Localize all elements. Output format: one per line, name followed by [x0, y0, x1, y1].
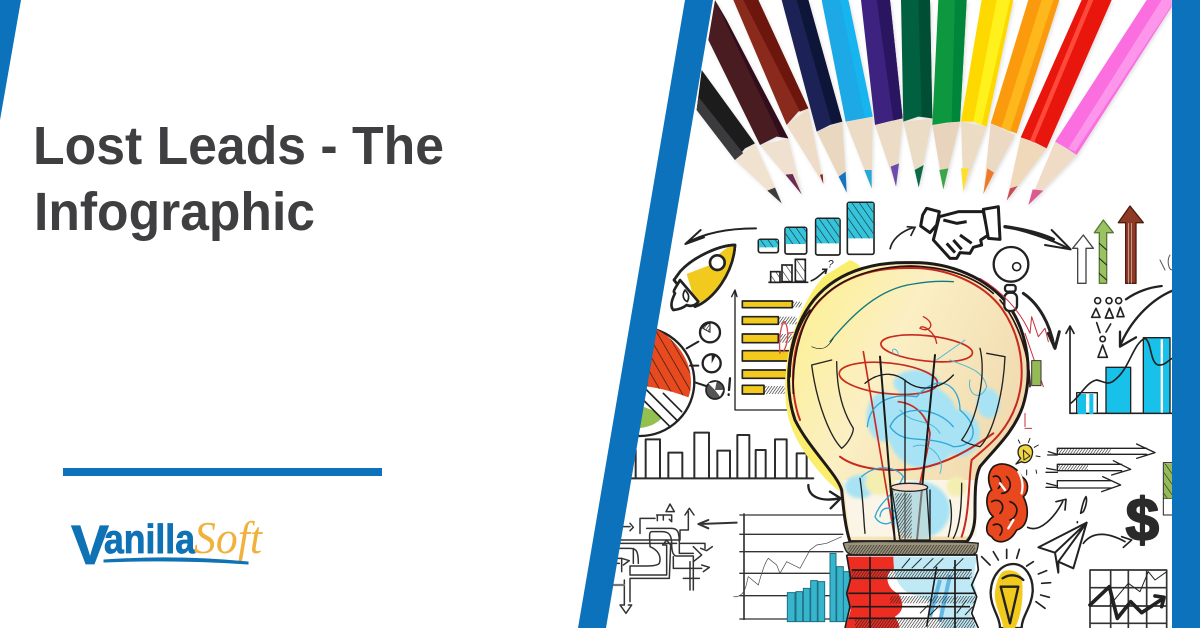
pencils fan [697, 0, 1172, 205]
small idea bulb [1016, 438, 1040, 475]
arrow network diagram [613, 504, 712, 613]
pencil: navy [782, 0, 847, 193]
title [33, 116, 444, 242]
red sketch zigzag near bulb [980, 278, 1048, 428]
outline strokes [789, 263, 1030, 543]
arrow to handshake [890, 227, 915, 249]
diagonal blue band [578, 0, 713, 628]
hatched mini bars: ? [828, 258, 834, 270]
logo: VanillaSoft [71, 512, 263, 576]
logo: VanillaSoft: V [71, 513, 109, 576]
pencil: black [697, 70, 782, 203]
bulb halo [785, 260, 860, 493]
paper plane [1038, 523, 1132, 573]
exclamation mark [1077, 497, 1087, 523]
pencil: maroon [708, 0, 802, 194]
filament wires [865, 355, 953, 543]
pencil: yellow [961, 0, 1013, 192]
curved arrow to growth arrows [1005, 227, 1071, 249]
icon: head with neck [994, 247, 1059, 348]
title: Lost Leads - The [33, 116, 444, 176]
pencil: orange [983, 0, 1059, 194]
icon: yellow bulb [982, 549, 1051, 628]
lower bulb neck highlight [843, 480, 977, 537]
divider bar [63, 468, 382, 476]
bulb glass [790, 264, 1027, 542]
pencil: brown [733, 0, 823, 184]
blue glow patches [845, 370, 1000, 538]
green gauge [1032, 361, 1041, 386]
people group [1092, 298, 1124, 357]
arrow pointing left [698, 520, 737, 528]
right illustrations [980, 206, 1172, 628]
inner reflections [812, 348, 1005, 538]
title: Infographic [34, 182, 315, 242]
curved arrow to neck [808, 485, 841, 508]
pencil: red [1007, 0, 1112, 201]
hatched mini bars [768, 258, 834, 282]
swooshing arrow to bar chart [1120, 286, 1172, 347]
socket stem [892, 488, 930, 540]
yellow horizontal bar chart [732, 290, 802, 410]
grid lines and trend line [739, 513, 843, 620]
lined chart with rising columns [733, 513, 849, 622]
brain arrow [1028, 499, 1066, 529]
pencil: purple [861, 0, 903, 187]
cyan bar chart [1066, 326, 1172, 414]
small column charts [758, 202, 915, 282]
pie chart cluster [638, 321, 732, 438]
pencil: sky blue [822, 0, 873, 188]
pencil: green [932, 0, 967, 189]
partial hatched bar at edge [1163, 463, 1172, 515]
growth arrows [1073, 206, 1143, 283]
pencil: pink [1028, 0, 1172, 205]
right blue band [1172, 0, 1200, 628]
brain [987, 464, 1027, 542]
photo illustration panel [586, 0, 1172, 628]
left illustrations [613, 227, 814, 614]
corner accent: blue wedge [0, 0, 21, 120]
three progress arrows [1046, 444, 1155, 492]
grid chart with zigzag [1090, 570, 1167, 628]
logo: VanillaSoft: Soft [194, 512, 263, 563]
pencil: dark green [901, 0, 932, 187]
cyan column set [758, 202, 874, 255]
logo: VanillaSoft: anilla [104, 516, 196, 562]
icon: handshake [921, 207, 1000, 258]
light bulb centrepiece [785, 260, 1030, 628]
screw base [843, 541, 978, 628]
red and blue filament scribbles [838, 317, 987, 540]
icon: dollar sign: $ [1126, 487, 1159, 554]
scribble at right edge [1160, 255, 1172, 270]
icon: rocket [672, 245, 735, 310]
outline column chart [630, 433, 813, 478]
arrow swoosh above rocket [685, 228, 756, 244]
